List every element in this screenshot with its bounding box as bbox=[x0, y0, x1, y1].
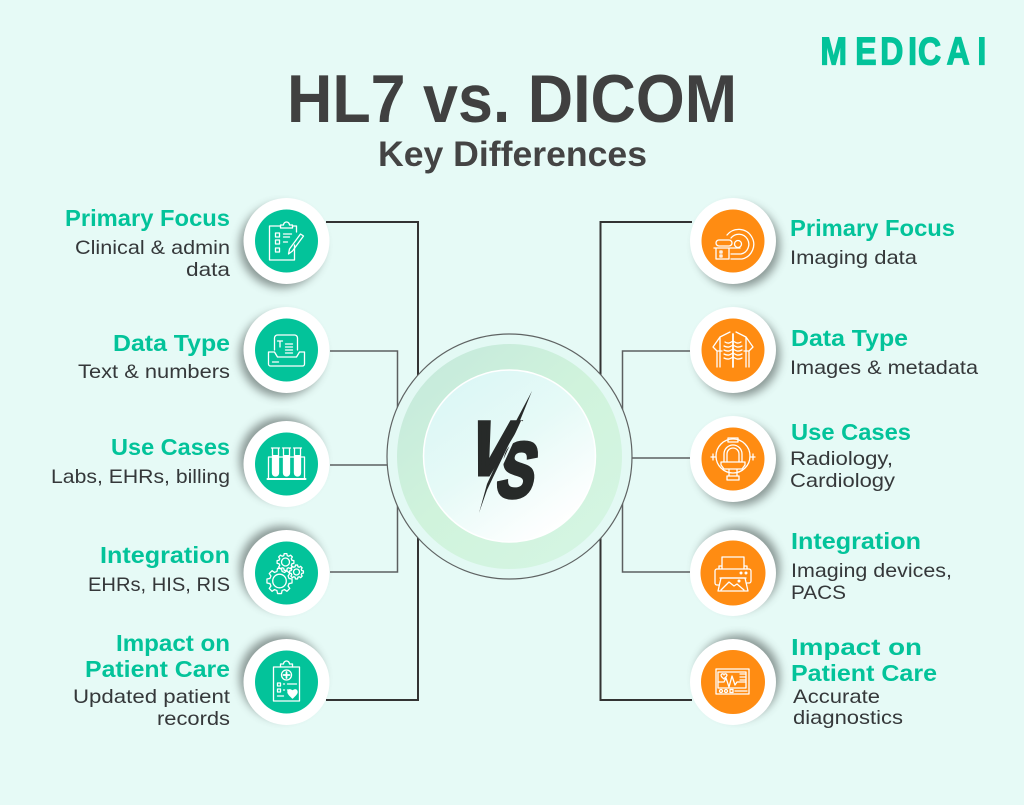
connector lines: DICOM side bbox=[600, 222, 692, 700]
description: EHRs, HIS, RIS bbox=[88, 574, 230, 596]
description: Labs, EHRs, billing bbox=[51, 466, 230, 488]
DICOM item 5: Patient Care bbox=[791, 660, 937, 686]
DICOM item 1 bbox=[690, 198, 955, 288]
VS text bbox=[458, 406, 546, 514]
description: Updated patient bbox=[73, 686, 231, 708]
description: Imaging devices, bbox=[791, 560, 952, 582]
label: Data Type bbox=[113, 330, 230, 356]
HL7 item 5: Patient Care bbox=[85, 656, 230, 682]
description: Accurate bbox=[793, 686, 880, 708]
DICOM item 3 bbox=[690, 416, 911, 506]
label: Use Cases bbox=[111, 434, 230, 460]
label: Integration bbox=[791, 528, 921, 554]
label: Impact on bbox=[791, 634, 922, 660]
DICOM item 2 bbox=[690, 307, 978, 397]
connector lines: HL7 side bbox=[326, 222, 418, 700]
description: Radiology, bbox=[790, 448, 893, 470]
label: Use Cases bbox=[791, 419, 911, 445]
description: Images & metadata bbox=[790, 357, 978, 379]
label: Primary Focus bbox=[65, 205, 230, 231]
VS text: V bbox=[458, 406, 526, 492]
DICOM item 4: PACS bbox=[791, 582, 846, 604]
DICOM item 5 bbox=[690, 634, 937, 729]
logo: MEDICAI bbox=[820, 30, 986, 73]
lightning slash bbox=[479, 391, 532, 513]
icon: MRI scanner bbox=[690, 198, 780, 288]
title: HL7 vs. DICOM bbox=[287, 61, 737, 137]
icon: CT scanner bbox=[690, 416, 780, 506]
description: Clinical & admin bbox=[75, 237, 230, 259]
DICOM item 5: diagnostics bbox=[793, 707, 903, 729]
subtitle: Key Differences bbox=[378, 135, 647, 174]
label: Integration bbox=[100, 542, 230, 568]
icon: document tray bbox=[240, 307, 330, 397]
label: Impact on bbox=[116, 630, 230, 656]
icon: medical chart bbox=[240, 635, 330, 725]
HL7 item 2 bbox=[78, 307, 330, 397]
HL7 item 5: records bbox=[157, 708, 230, 730]
VS text: S bbox=[491, 427, 546, 514]
central VS badge bbox=[387, 334, 632, 579]
HL7 item 3 bbox=[51, 417, 330, 507]
icon: printer bbox=[690, 526, 780, 616]
HL7 item 5 bbox=[73, 630, 330, 730]
icon: gears bbox=[240, 526, 330, 616]
icon: chest x-ray bbox=[690, 307, 780, 397]
description: Text & numbers bbox=[78, 361, 230, 383]
description: Imaging data bbox=[790, 247, 917, 269]
HL7 item 1 bbox=[65, 198, 330, 288]
DICOM item 4 bbox=[690, 526, 952, 616]
HL7 item 1: data bbox=[186, 259, 230, 281]
DICOM item 3: Cardiology bbox=[790, 470, 895, 492]
icon: clipboard checklist bbox=[240, 198, 330, 288]
label: Primary Focus bbox=[790, 215, 955, 241]
label: Data Type bbox=[791, 325, 908, 351]
HL7 item 4 bbox=[88, 526, 330, 616]
icon: heart monitor bbox=[690, 635, 780, 725]
icon: test tubes bbox=[240, 417, 330, 507]
